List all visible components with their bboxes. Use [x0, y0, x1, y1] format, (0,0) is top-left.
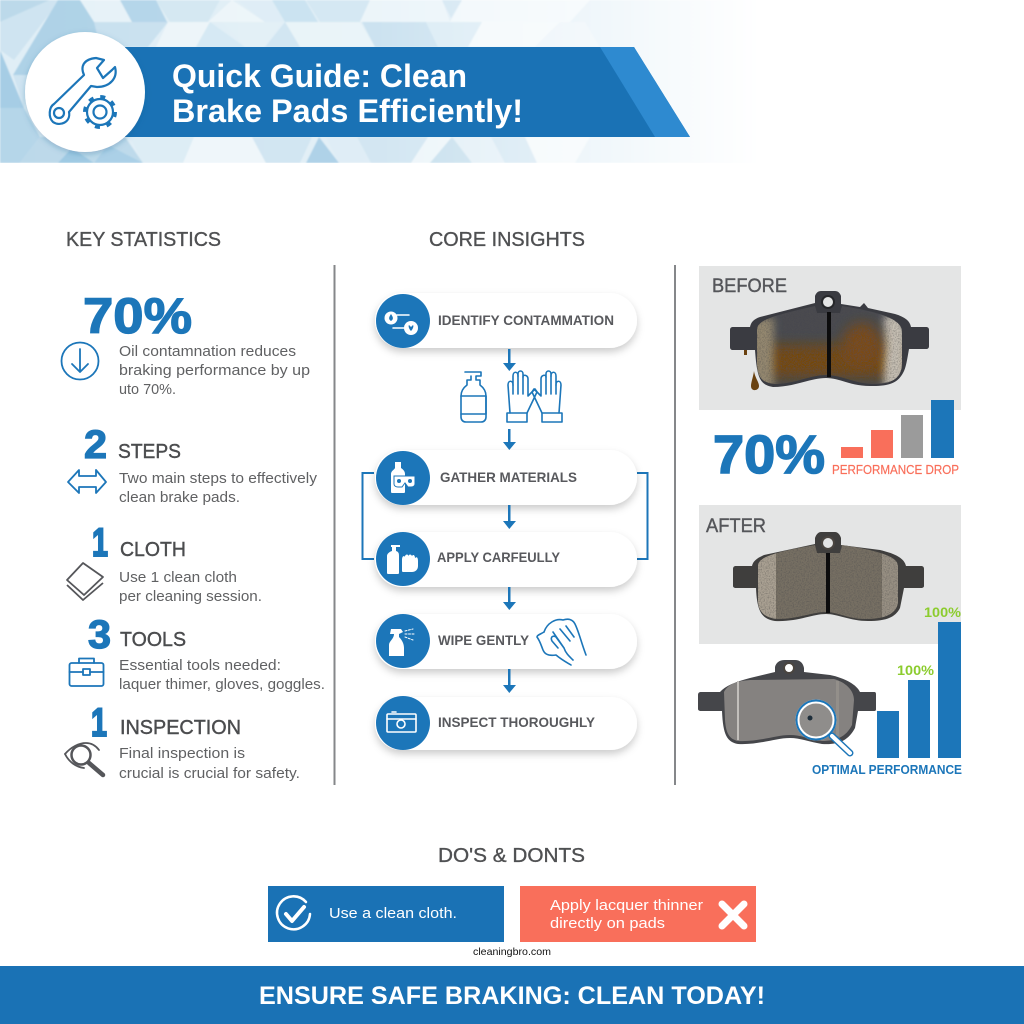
step: inspect thoroughly [375, 696, 637, 750]
stat: 70%: Oil contamnation reduces [119, 343, 296, 360]
icon: oil drops [384, 312, 418, 335]
footer banner: ENSURE SAFE BRAKING: CLEAN TODAY! [259, 982, 765, 1010]
stat: 70%: 70% [713, 425, 825, 485]
icon: double arrow [68, 470, 106, 493]
callout: don't: directly on pads [550, 915, 665, 932]
connector brackets [362, 473, 648, 559]
title: Quick Guide: Clean [172, 58, 467, 94]
callout: do [268, 886, 504, 942]
title banner [125, 47, 690, 137]
icon: spray bottle [389, 629, 415, 656]
icon: camera frame [387, 712, 416, 732]
icon: hand with cloth [537, 619, 586, 665]
stat: 1 inspection: INSPECTION [120, 717, 241, 739]
stat: 3 tools: TOOLS [120, 629, 186, 651]
stat: 70% [62, 288, 310, 398]
oil drips [744, 350, 759, 390]
panel: key statistics [62, 288, 325, 782]
arrow [503, 429, 516, 450]
step: inspect thoroughly: INSPECT THOROUGHLY [438, 714, 596, 730]
step: identify contamination: IDENTIFY CONTAMMATION [438, 312, 614, 328]
callout: do: Use a clean cloth. [329, 905, 457, 922]
chart: optimal performance [812, 604, 962, 777]
bars [877, 622, 961, 758]
step: wipe gently: WIPE GENTLY [438, 632, 530, 648]
heading: do's and don'ts: DO'S & DONTS [438, 845, 585, 867]
stat: 70%: 70% [83, 288, 192, 344]
footer banner [0, 966, 1024, 1024]
label: after: AFTER [706, 516, 766, 537]
title: Brake Pads Efficiently! [172, 93, 523, 129]
icon: eye magnifier [65, 743, 103, 775]
stat: 3 tools: laquer thimer, gloves, goggles. [119, 676, 325, 693]
callout: don't: Apply lacquer thinner [550, 897, 703, 914]
heading: core insights: CORE INSIGHTS [429, 229, 585, 251]
panel: core insights flow [362, 293, 648, 750]
stat: 1 inspection: 1 [91, 701, 107, 745]
panel: before photo [699, 266, 961, 410]
step: gather materials: GATHER MATERIALS [440, 469, 577, 485]
arrow [503, 669, 516, 693]
stat: 1 cloth: Use 1 clean cloth [119, 569, 237, 586]
value labels: 100% [924, 604, 962, 620]
stat: 1 inspection: crucial is crucial for safety. [119, 765, 300, 782]
panel: after photo [699, 505, 961, 644]
chart: performance drop [713, 400, 959, 485]
icon: down arrow [62, 342, 98, 380]
arrow [503, 587, 516, 610]
step: apply carefully [375, 532, 637, 587]
arrow [503, 349, 516, 371]
label: before: BEFORE [712, 276, 787, 297]
value labels: 100% [897, 662, 935, 678]
icon: bottle and hand [387, 545, 418, 574]
stat: 1 cloth: 1 [92, 521, 108, 565]
label: optimal performance: OPTIMAL PERFORMANCE [812, 762, 962, 777]
title [172, 58, 523, 129]
arrow [503, 505, 516, 529]
step: wipe gently [375, 614, 637, 669]
stat: 3 tools [70, 613, 325, 693]
step: gather materials [375, 450, 637, 505]
stat: 2 steps: Two main steps to effectively [119, 470, 318, 487]
column dividers [334, 265, 676, 785]
value labels [897, 604, 962, 678]
stat: 1 cloth: per cleaning session. [119, 588, 262, 605]
icon: toolbox [70, 658, 104, 686]
icon: bottle [461, 372, 486, 422]
icon: cross [722, 904, 744, 926]
stat: 2 steps: clean brake pads. [119, 489, 240, 506]
image: clean brake pad [733, 532, 924, 625]
icon: magnifier [796, 700, 850, 753]
stat: 1 cloth [67, 521, 262, 605]
stat: 70%: uto 70%. [119, 381, 176, 398]
stat: 2 steps: 2 [84, 423, 107, 467]
step: identify contamination [375, 293, 637, 348]
stat: 2 steps: STEPS [118, 441, 181, 463]
header background pattern [0, 0, 762, 163]
icon: gloves [507, 371, 562, 422]
label: performance drop: PERFORMANCE DROP [832, 462, 959, 477]
icon: check circle [277, 896, 310, 929]
stat: 70%: braking performance by up [119, 362, 310, 379]
stat: 2 steps [68, 423, 318, 506]
stat: 3 tools: 3 [88, 613, 111, 657]
icon: bottle and goggles [391, 462, 415, 493]
stat: 1 cloth: CLOTH [120, 539, 186, 561]
bars [841, 400, 954, 458]
icon: wrench and gear badge [25, 32, 145, 152]
stat: 3 tools: Essential tools needed: [119, 657, 281, 674]
stat: 1 inspection: Final inspection is [119, 745, 245, 762]
heading: key statistics: KEY STATISTICS [66, 229, 221, 251]
icon: folded cloth [67, 563, 103, 600]
image: contaminated brake pad [730, 291, 929, 390]
source credit: cleaningbro.com [473, 946, 551, 958]
image: inspected brake pad [698, 660, 876, 753]
step: apply carefully: APPLY CARFEULLY [437, 549, 561, 565]
callout: don't [520, 886, 756, 942]
stat: 1 inspection [65, 701, 300, 782]
